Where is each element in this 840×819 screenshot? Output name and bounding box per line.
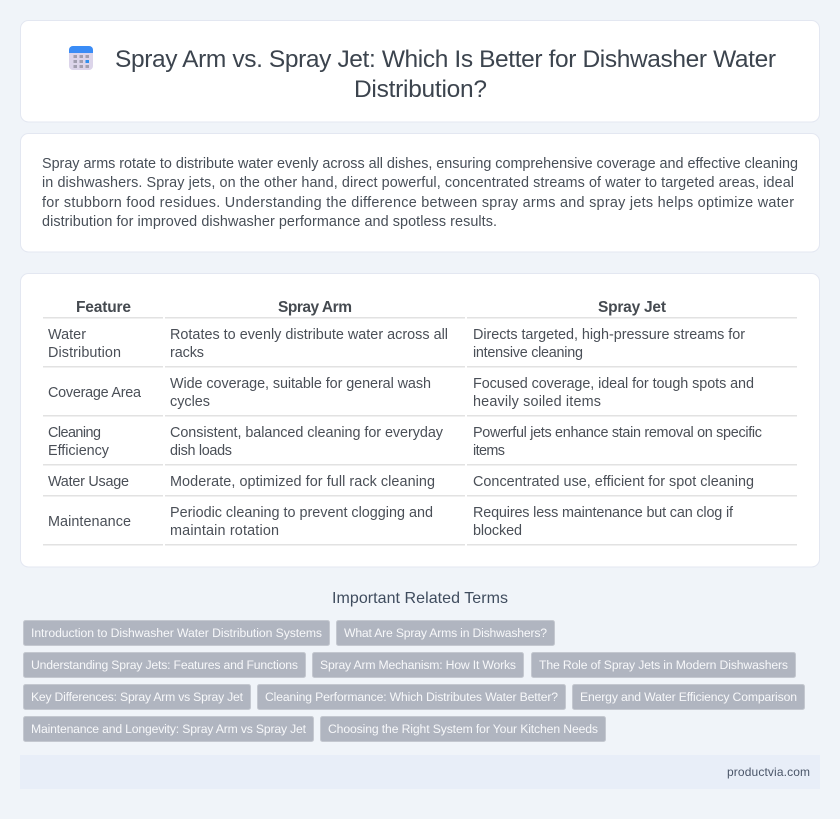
- table row: water distribution: [48, 327, 745, 361]
- title: Distribution?: [354, 76, 487, 103]
- table row: water usage: Concentrated use, efficient for spot cleaning: [473, 474, 754, 490]
- table row: water distribution: intensive cleaning: [473, 345, 583, 361]
- panel: title header: [20, 20, 820, 122]
- text block: introduction: Spray arms rotate to distribute water evenly across all dishes, ensuring comprehensive coverage and effective cleaning: [42, 156, 798, 172]
- table header row: [76, 299, 666, 316]
- panel: related term tags: Introduction to Dishwasher Water Distribution Systems: [31, 626, 322, 640]
- table row: coverage area: Coverage Area: [48, 385, 141, 401]
- icon: dishwasher grid: [69, 46, 93, 70]
- table row: maintenance: Periodic cleaning to prevent clogging and: [170, 505, 433, 521]
- panel: related term tags: Energy and Water Efficiency Comparison: [580, 690, 797, 704]
- table row: maintenance: Requires less maintenance but can clog if: [473, 505, 734, 521]
- text block: introduction: for stubborn food residues. Understanding the difference between spray arms and spray jets helps optimize water: [42, 195, 794, 211]
- panel: related term tags: The Role of Spray Jets in Modern Dishwashers: [539, 658, 788, 672]
- table row: cleaning efficiency: Powerful jets enhance stain removal on specific: [473, 425, 762, 441]
- panel: related term tags: Cleaning Performance: Which Distributes Water Better?: [265, 690, 558, 704]
- footer: productvia.com: [727, 765, 810, 779]
- table row: cleaning efficiency: items: [473, 443, 505, 459]
- table header row: Spray Arm: [278, 299, 352, 316]
- table row: water distribution: racks: [170, 345, 204, 361]
- table row: water usage: Moderate, optimized for full rack cleaning: [170, 474, 435, 490]
- table row: maintenance: blocked: [473, 523, 522, 539]
- title: Spray Arm vs. Spray Jet: Which Is Better for Dishwasher Water: [115, 46, 776, 73]
- table row: coverage area: [48, 376, 754, 410]
- table row: cleaning efficiency: dish loads: [170, 443, 232, 459]
- panel: related term tags: [24, 620, 804, 742]
- table row: maintenance: maintain rotation: [170, 523, 279, 539]
- heading: important related terms: Important Related Terms: [332, 590, 508, 607]
- table row: coverage area: Wide coverage, suitable for general wash: [170, 376, 431, 392]
- table row: coverage area: Focused coverage, ideal for tough spots and: [473, 376, 754, 392]
- table row: water distribution: Rotates to evenly distribute water across all: [170, 327, 448, 343]
- table row: coverage area: cycles: [170, 394, 210, 410]
- table header row: Feature: [76, 299, 131, 316]
- panel: related term tags: Key Differences: Spray Arm vs Spray Jet: [31, 690, 244, 704]
- footer: [20, 755, 820, 789]
- panel: introduction paragraph: [20, 134, 820, 252]
- table row: coverage area: heavily soiled items: [473, 394, 601, 410]
- table row: maintenance: Maintenance: [48, 514, 131, 530]
- table row: water usage: Water Usage: [48, 474, 129, 490]
- text block: introduction: in dishwashers. Spray jets, on the other hand, direct powerful, concentrated streams of water to targeted areas, ideal: [42, 175, 794, 191]
- panel: related term tags: Spray Arm Mechanism: How It Works: [320, 658, 516, 672]
- table header row: Spray Jet: [598, 299, 666, 316]
- text block: introduction: [42, 156, 798, 230]
- table row: water usage: [48, 474, 754, 490]
- table row: water distribution: Distribution: [48, 345, 121, 361]
- table row: cleaning efficiency: Efficiency: [48, 443, 110, 459]
- panel: related term tags: What Are Spray Arms in Dishwashers?: [344, 626, 547, 640]
- table row: maintenance: [48, 505, 734, 539]
- table row: cleaning efficiency: Cleaning: [48, 425, 101, 441]
- table row: cleaning efficiency: Consistent, balanced cleaning for everyday: [170, 425, 444, 441]
- panel: related term tags: Choosing the Right System for Your Kitchen Needs: [328, 722, 598, 736]
- table row: cleaning efficiency: [48, 425, 762, 459]
- table row: water distribution: Directs targeted, high-pressure streams for: [473, 327, 745, 343]
- panel: related term tags: Understanding Spray Jets: Features and Functions: [31, 658, 298, 672]
- text block: introduction: distribution for improved dishwasher performance and spotless results.: [42, 214, 497, 230]
- panel: comparison table: [20, 274, 820, 567]
- table row: water distribution: Water: [48, 327, 86, 343]
- title: [115, 46, 776, 103]
- panel: related term tags: Maintenance and Longevity: Spray Arm vs Spray Jet: [31, 722, 307, 736]
